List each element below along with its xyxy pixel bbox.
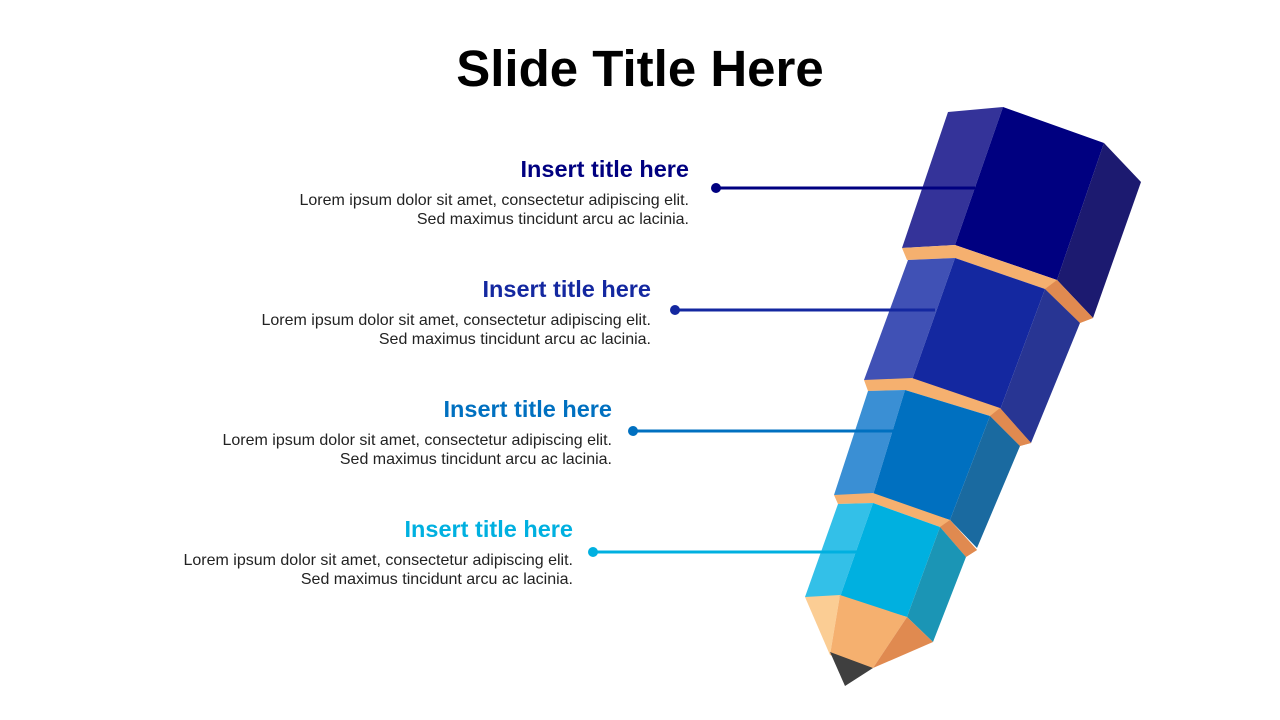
text block 2: Insert title here — [483, 276, 651, 302]
text block 4 — [183, 516, 573, 588]
pencil segment 3 — [834, 390, 1020, 557]
text block 3: Sed maximus tincidunt arcu ac lacinia. — [340, 451, 612, 468]
text block 1: Sed maximus tincidunt arcu ac lacinia. — [417, 211, 689, 228]
text block 1: Insert title here — [521, 156, 689, 182]
text block 3: Insert title here — [444, 396, 612, 422]
pencil tip — [805, 595, 933, 686]
text block 4: Sed maximus tincidunt arcu ac lacinia. — [301, 571, 573, 588]
text block 2 — [261, 276, 651, 348]
connector 4 — [588, 547, 858, 557]
title: Slide Title Here — [456, 40, 824, 97]
text block 1 — [299, 156, 689, 228]
connector 2 — [670, 305, 935, 315]
text block 4: Lorem ipsum dolor sit amet, consectetur adipiscing elit. — [183, 552, 573, 569]
text block 2: Sed maximus tincidunt arcu ac lacinia. — [379, 331, 651, 348]
pencil segment 2 — [864, 258, 1080, 446]
text block 4: Insert title here — [405, 516, 573, 542]
text block 2: Lorem ipsum dolor sit amet, consectetur adipiscing elit. — [261, 312, 651, 329]
text block 1: Lorem ipsum dolor sit amet, consectetur adipiscing elit. — [299, 192, 689, 209]
connector 3 — [628, 426, 897, 436]
connector 1 — [711, 183, 975, 193]
pencil segment 1 — [902, 107, 1141, 323]
pencil segment 4 — [805, 503, 966, 642]
text block 3 — [222, 396, 612, 468]
text block 3: Lorem ipsum dolor sit amet, consectetur adipiscing elit. — [222, 432, 612, 449]
